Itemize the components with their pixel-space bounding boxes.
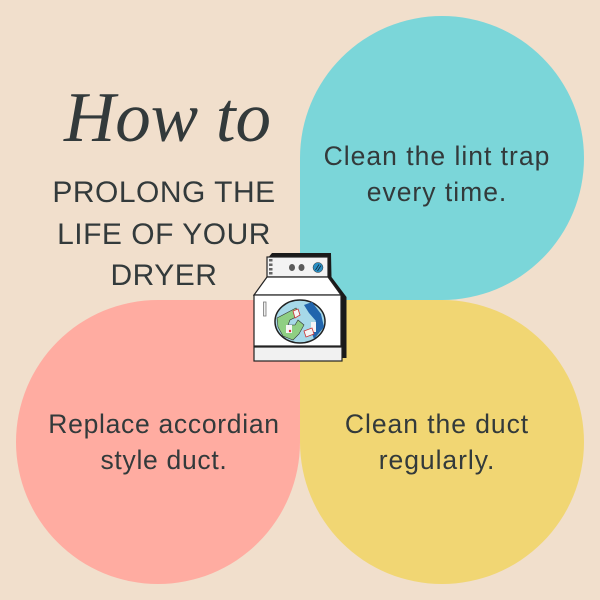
text: accordian duct tip: style duct.	[100, 445, 228, 475]
script heading: How to	[64, 79, 271, 157]
dryer drum with clothes	[275, 300, 325, 343]
panel: clean the lint trap	[300, 16, 584, 300]
subheading: DRYER	[110, 259, 217, 292]
blue trousers	[304, 302, 324, 339]
dryer shadow	[267, 253, 346, 358]
socks	[286, 309, 316, 337]
subheading	[52, 176, 276, 292]
text: accordian duct tip: Replace accordian	[48, 409, 280, 439]
text: lint trap tip: every time.	[367, 177, 507, 207]
text: clean duct tip: Clean the duct	[345, 409, 529, 439]
green shirt	[277, 308, 304, 340]
text: lint trap tip: Clean the lint trap	[324, 141, 550, 171]
subheading: LIFE OF YOUR	[57, 218, 271, 250]
dryer body	[254, 277, 342, 361]
subheading: PROLONG THE	[52, 176, 276, 209]
text: lint trap tip	[324, 141, 550, 207]
panel: replace accordian duct	[16, 300, 300, 584]
dryer control panel	[267, 257, 328, 277]
panel: clean the duct	[300, 300, 584, 584]
text: clean duct tip: regularly.	[379, 445, 495, 475]
text: clean duct tip	[345, 409, 529, 475]
text: accordian duct tip	[48, 409, 280, 475]
icon: clothes dryer	[252, 253, 346, 362]
